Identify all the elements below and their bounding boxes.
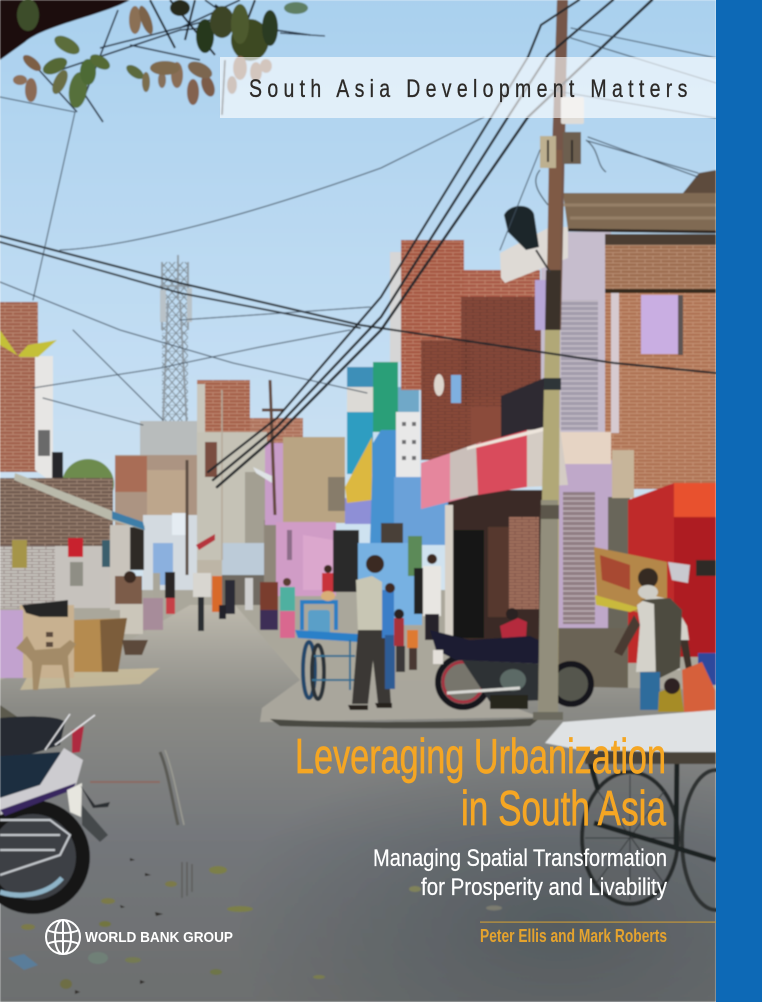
subtitle line one: Managing Spatial Transformation [373, 845, 667, 872]
main title [295, 730, 667, 836]
authors: Peter Ellis and Mark Roberts [480, 926, 667, 946]
right building with corrugated roof [500, 170, 716, 489]
right foreground cart with wheels [545, 710, 750, 910]
distant tree [62, 458, 115, 490]
World Bank Group logo [46, 920, 233, 954]
series title: South Asia Development Matters [249, 75, 687, 103]
left brick building [0, 302, 63, 485]
utility pole [533, 0, 568, 720]
subtitle [373, 845, 667, 901]
distant buildings at end of street [115, 421, 200, 590]
dog [16, 636, 76, 690]
old man with beard [614, 568, 692, 710]
dark balcony railing [501, 378, 544, 438]
standing man by cart [348, 555, 392, 710]
low shed with corrugated roof [0, 473, 145, 610]
distant street lamp and pole [187, 380, 284, 575]
sky [0, 0, 716, 640]
patterned awning [421, 427, 568, 509]
subtitle line two: for Prosperity and Livability [421, 874, 667, 901]
icon: globe [46, 920, 80, 954]
blue spine strip [716, 0, 762, 1002]
ground and road [0, 605, 716, 1002]
seated woman in orange and child [658, 662, 715, 712]
pink and beige building [265, 437, 359, 596]
series banner band [220, 57, 716, 118]
roller shutter and side wall [558, 431, 635, 688]
telecom tower [159, 254, 192, 422]
tall brick building [390, 240, 543, 460]
wordmark: WORLD BANK GROUP [85, 929, 233, 946]
overhead power cables [0, 0, 716, 487]
pole-mounted junction boxes [536, 97, 606, 205]
tree branch with leaves [0, 0, 325, 122]
shirtless man and seated person [115, 571, 163, 634]
title line two: in South Asia [461, 782, 667, 836]
colourful blue and green building [345, 362, 448, 625]
blue food cart [295, 591, 358, 699]
left parked motorcycle [0, 714, 110, 907]
wooden cot leaning on wall [74, 618, 148, 672]
shop front and door [445, 490, 543, 640]
leaves and litter on road [8, 858, 502, 994]
street lamp [504, 206, 550, 272]
person in red shirt behind motorbike [500, 608, 527, 638]
tan box with dark cover [0, 600, 74, 678]
red wall [628, 483, 716, 685]
hanging laundry [594, 547, 716, 613]
ground base behind buildings [0, 589, 716, 690]
central brick building [196, 380, 303, 605]
parked motorbike [430, 630, 591, 709]
people walking in the distance [153, 565, 333, 638]
children and bystanders near blue wall [382, 554, 441, 689]
